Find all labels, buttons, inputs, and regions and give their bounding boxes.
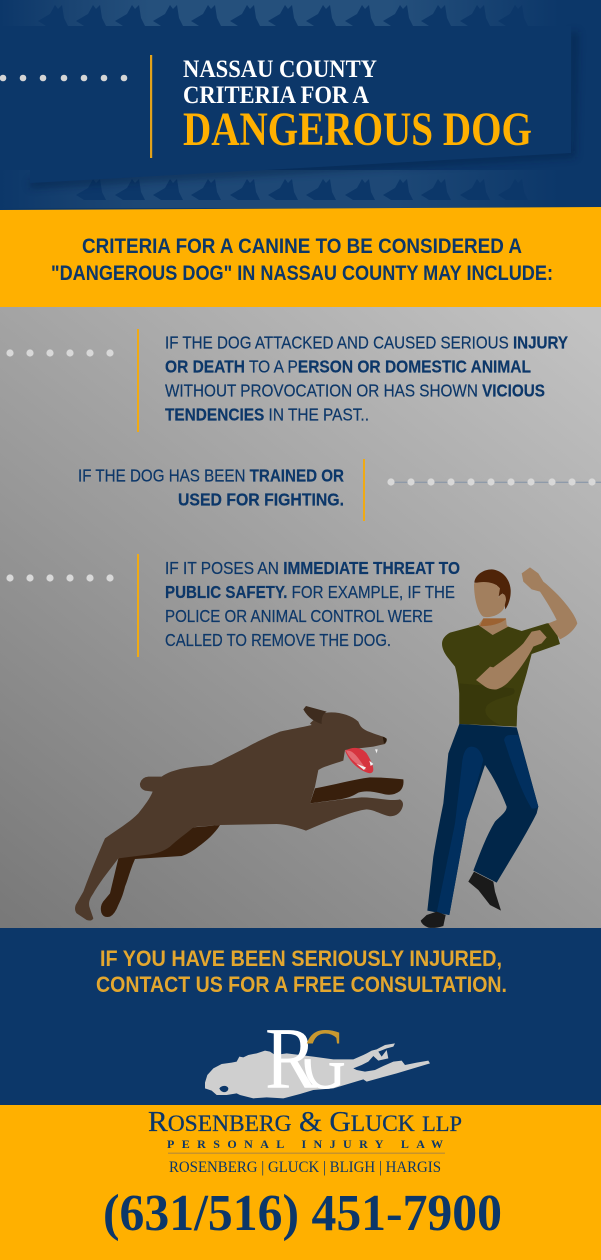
criterion 3 divider — [137, 554, 139, 657]
criterion 3 dots — [6, 574, 114, 582]
criterion 1 text: IF THE DOG ATTACKED AND CAUSED SERIOUS INJURY — [165, 332, 568, 352]
criterion 1 text: TENDENCIES IN THE PAST.. — [165, 404, 369, 424]
criterion 1 text: OR DEATH TO A PERSON OR DOMESTIC ANIMAL — [165, 356, 531, 376]
criterion 1 divider — [137, 329, 139, 432]
call to action text: CONTACT US FOR A FREE CONSULTATION. — [96, 972, 507, 997]
criterion 2 text: IF THE DOG HAS BEEN TRAINED OR — [78, 466, 344, 486]
illustration: leaping dog — [75, 706, 404, 921]
partner names: ROSENBERG | GLUCK | BLIGH | HARGIS — [169, 1159, 441, 1176]
criterion 2 text: USED FOR FIGHTING. — [178, 490, 344, 510]
criterion 1 dots — [6, 349, 114, 357]
criterion 3 text: IF IT POSES AN IMMEDIATE THREAT TO — [165, 558, 460, 578]
title: CRITERIA FOR A — [183, 82, 369, 109]
panel: yellow subtitle band — [0, 207, 601, 307]
criterion 1 text: WITHOUT PROVOCATION OR HAS SHOWN VICIOUS — [165, 380, 545, 400]
header dots — [0, 75, 127, 81]
criterion 3 text: PUBLIC SAFETY. FOR EXAMPLE, IF THE — [165, 582, 455, 602]
logo: Long Island map with monogram: G — [302, 1011, 346, 1108]
call to action text: IF YOU HAVE BEEN SERIOUSLY INJURED, — [100, 946, 502, 971]
logo: Long Island map with monogram: R — [265, 1011, 317, 1108]
logo: Long Island map with monogram — [205, 1011, 430, 1108]
header divider — [150, 55, 152, 158]
firm tagline rule — [168, 1152, 445, 1154]
title: DANGEROUS DOG — [183, 103, 532, 156]
criterion 3 text — [165, 558, 460, 650]
panel: gray criteria area — [0, 300, 601, 930]
criterion 3 text: CALLED TO REMOVE THE DOG. — [165, 630, 391, 650]
panel: consultation call to action — [0, 928, 601, 1106]
criterion 2 divider — [363, 459, 365, 521]
criterion 3 text: POLICE OR ANIMAL CONTROL WERE — [165, 606, 433, 626]
firm name: ROSENBERG & GLUCK LLP — [148, 1106, 462, 1138]
call to action text — [96, 946, 507, 997]
criterion 1 text — [165, 332, 568, 424]
criterion 2 dotted line — [387, 478, 601, 486]
subtitle — [51, 235, 553, 285]
title: NASSAU COUNTY — [183, 56, 377, 83]
criterion 2 text — [78, 466, 344, 510]
title — [183, 56, 532, 156]
header background — [0, 0, 601, 212]
subtitle: CRITERIA FOR A CANINE TO BE CONSIDERED A — [82, 235, 522, 258]
illustration: man — [421, 567, 577, 928]
firm tagline: PERSONAL INJURY LAW — [167, 1137, 443, 1151]
header panel — [30, 26, 571, 183]
phone number: (631/516) 451-7900 — [103, 1185, 502, 1242]
panel: firm contact band — [0, 1105, 601, 1260]
